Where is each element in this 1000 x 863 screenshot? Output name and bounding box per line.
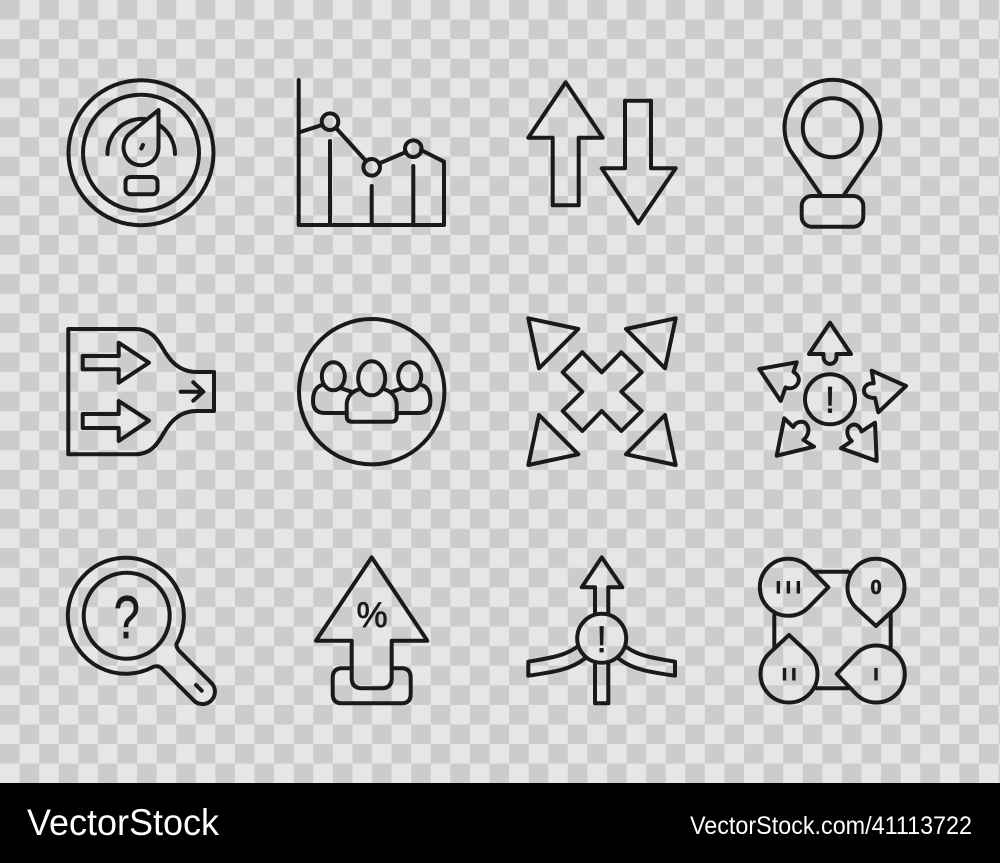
icon: junction with alert — [528, 557, 675, 703]
icon: four pins on a square: II — [782, 665, 801, 684]
icon: four pins on a square: 0 — [870, 577, 882, 599]
icon: line chart — [299, 80, 444, 225]
icon: expand arrows with cross — [528, 318, 676, 465]
icon: alert with five arrows: ! — [825, 380, 835, 420]
icon: alert with five arrows — [759, 323, 906, 461]
icon: team in circle — [299, 319, 444, 464]
icon: junction with alert: ! — [597, 619, 607, 660]
icon: four pins on a square — [760, 559, 905, 703]
footer image id: VectorStock.com/41113722 — [690, 812, 972, 840]
icon: up and down arrows — [528, 82, 676, 223]
icon: location pin — [785, 80, 880, 227]
icon: magnifier with question mark: ? — [114, 584, 140, 651]
icon: gauge — [68, 80, 214, 225]
icon: four pins on a square: III — [776, 578, 806, 597]
icon: percent growth arrow — [316, 557, 427, 703]
icon: four pins on a square: I — [874, 665, 878, 684]
footer bar — [0, 783, 1000, 863]
icon: percent growth arrow: % — [356, 596, 388, 635]
footer logo text: VectorStock — [27, 802, 219, 843]
icon: funnel with arrows — [68, 329, 214, 454]
icon: magnifier with question mark — [68, 558, 215, 704]
